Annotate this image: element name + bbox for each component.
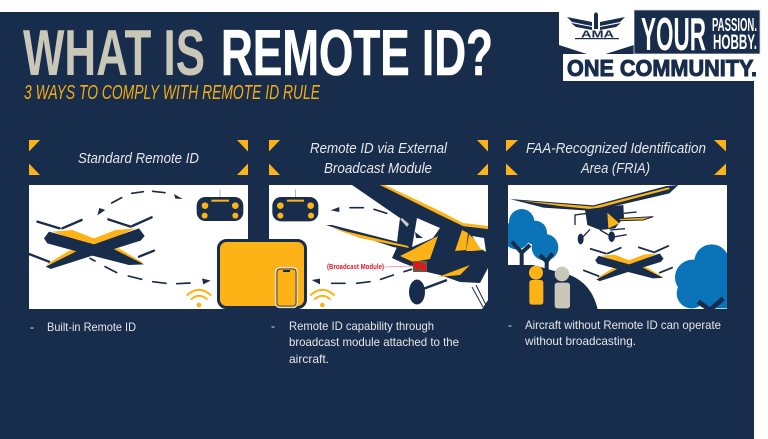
trees [503,209,730,308]
flight links [90,191,190,284]
panel: External Broadcast Module [269,140,488,309]
icon: phone [276,268,298,308]
subtitle: 3 WAYS TO COMPLY WITH REMOTE ID RULE [24,82,320,104]
airplane [510,185,678,211]
title: WHAT IS [23,16,205,89]
airplane [326,185,488,309]
heading: Remote ID via External [310,140,448,157]
illustration [508,185,727,309]
drone [584,246,672,281]
logo: AMA: ONE COMMUNITY. [567,55,757,81]
device: receiver [218,240,306,308]
heading: FAA-Recognized Identification [526,140,706,157]
drone [27,217,154,269]
title: REMOTE ID? [221,16,493,89]
wifi [311,290,334,299]
panel: FRIA [503,140,730,310]
panel: Standard Remote ID [27,140,248,309]
text: FRIA bullet: Aircraft without Remote ID can operate [525,318,721,332]
text: FRIA bullet [508,318,721,348]
text: external module bullet: Remote ID capability through [289,319,434,333]
text: external module bullet: broadcast module attached to the [289,335,459,349]
text: standard bullet: Built-in Remote ID [47,320,136,334]
broadcast module [413,261,427,272]
people [529,266,543,280]
text: FRIA bullet: - [508,318,512,332]
text: external module bullet: aircraft. [289,352,329,366]
callout: broadcast module: (Broadcast Module) [327,264,384,271]
heading [526,140,706,177]
heading: Broadcast Module [324,160,432,177]
text: external module bullet [271,319,459,366]
illustration [269,185,488,309]
logo: AMA: AMA [581,30,614,40]
landing gear [423,280,447,289]
heading: Area (FRIA) [580,160,650,177]
text: external module bullet: - [271,319,275,333]
text: standard bullet: - [30,320,34,334]
navy connector [248,185,269,240]
text: FRIA bullet: without broadcasting. [524,334,636,348]
controller [220,189,221,197]
heading: Standard Remote ID [78,150,199,167]
illustration [29,185,248,309]
logo: AMA [559,2,761,81]
title [23,16,493,89]
hill [507,265,598,309]
corner markers [29,140,248,175]
wifi [187,290,211,299]
heading [310,140,448,177]
links [332,208,412,283]
controller [295,189,296,197]
